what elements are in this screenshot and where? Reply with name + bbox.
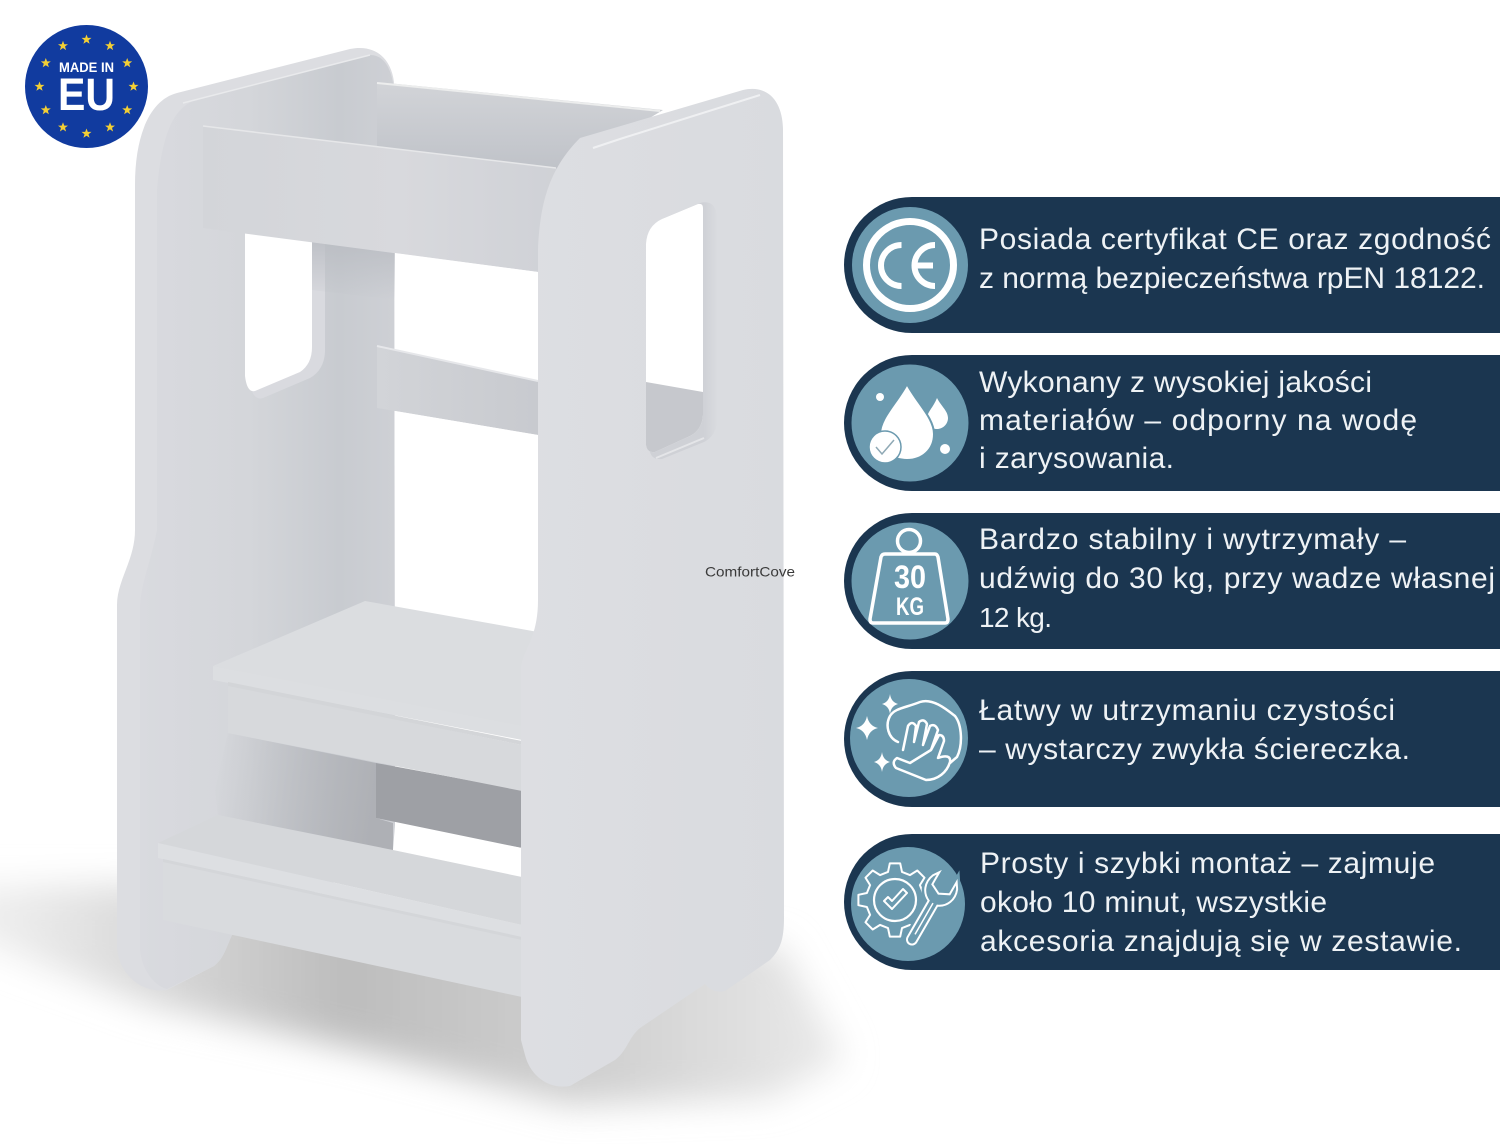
gap above lower step <box>393 825 522 877</box>
icon: 30 kg weight: 30 <box>894 559 926 595</box>
text: assembly: Prosty i szybki montaż – zajmuje <box>980 847 1435 880</box>
rail shadow on left panel <box>312 242 395 300</box>
badge text: EU: EU <box>58 69 115 120</box>
lower step <box>158 815 522 997</box>
badge: made in EU <box>25 25 148 148</box>
text: CE certificate <box>979 223 1491 295</box>
right side panel <box>521 89 784 1087</box>
text: materials: i zarysowania. <box>979 442 1174 475</box>
text: materials: materiałów – odporny na wodę <box>979 404 1417 437</box>
text: assembly: około 10 minut, wszystkie <box>980 886 1327 919</box>
text: load capacity: 12 kg. <box>979 602 1052 633</box>
panel: easy cleaning <box>844 671 1500 807</box>
text: easy cleaning: Łatwy w utrzymaniu czystości <box>979 694 1395 727</box>
text: materials <box>979 366 1417 475</box>
product: kitchen helper tower <box>117 48 784 1087</box>
floor shadow <box>0 885 845 1105</box>
watermark: ComfortCove: ComfortCove <box>705 564 795 580</box>
left panel shading between steps <box>215 733 393 851</box>
icon: CE mark <box>866 222 954 308</box>
text: CE certificate: z normą bezpieczeństwa rpEN 18122. <box>979 262 1485 295</box>
text: assembly <box>980 847 1462 958</box>
text: CE certificate: Posiada certyfikat CE oraz zgodność <box>979 223 1491 256</box>
text: load capacity: Bardzo stabilny i wytrzymały – <box>979 523 1406 556</box>
upper step <box>213 601 538 791</box>
badge text: made in: MADE IN <box>59 60 114 75</box>
front top rail <box>203 126 562 272</box>
middle rail <box>377 346 538 435</box>
icon: ring of stars <box>34 34 138 138</box>
icon: hand with cloth <box>856 694 961 780</box>
icon: 30 kg weight: KG <box>896 593 924 621</box>
panel: assembly <box>844 834 1500 970</box>
right panel window <box>646 202 717 459</box>
panel: materials <box>844 355 1500 491</box>
text: load capacity <box>979 523 1495 633</box>
opening below middle rail <box>395 411 538 640</box>
text: load capacity: udźwig do 30 kg, przy wadze własnej <box>979 562 1495 595</box>
icon: gear and wrench <box>858 863 961 952</box>
centre opening <box>395 253 538 381</box>
panel: CE certificate <box>844 197 1500 333</box>
icon: water drops <box>869 384 950 463</box>
left side panel <box>117 48 395 990</box>
text: easy cleaning: – wystarczy zwykła ściereczka. <box>979 733 1410 766</box>
text: materials: Wykonany z wysokiej jakości <box>979 366 1372 399</box>
back top rail <box>377 82 663 172</box>
text: easy cleaning <box>979 694 1410 766</box>
lower back rail <box>376 763 522 848</box>
left panel window <box>245 233 325 398</box>
panel: load capacity <box>844 513 1500 649</box>
icon: 30 kg weight <box>870 530 948 623</box>
text: assembly: akcesoria znajdują się w zestawie. <box>980 925 1462 958</box>
